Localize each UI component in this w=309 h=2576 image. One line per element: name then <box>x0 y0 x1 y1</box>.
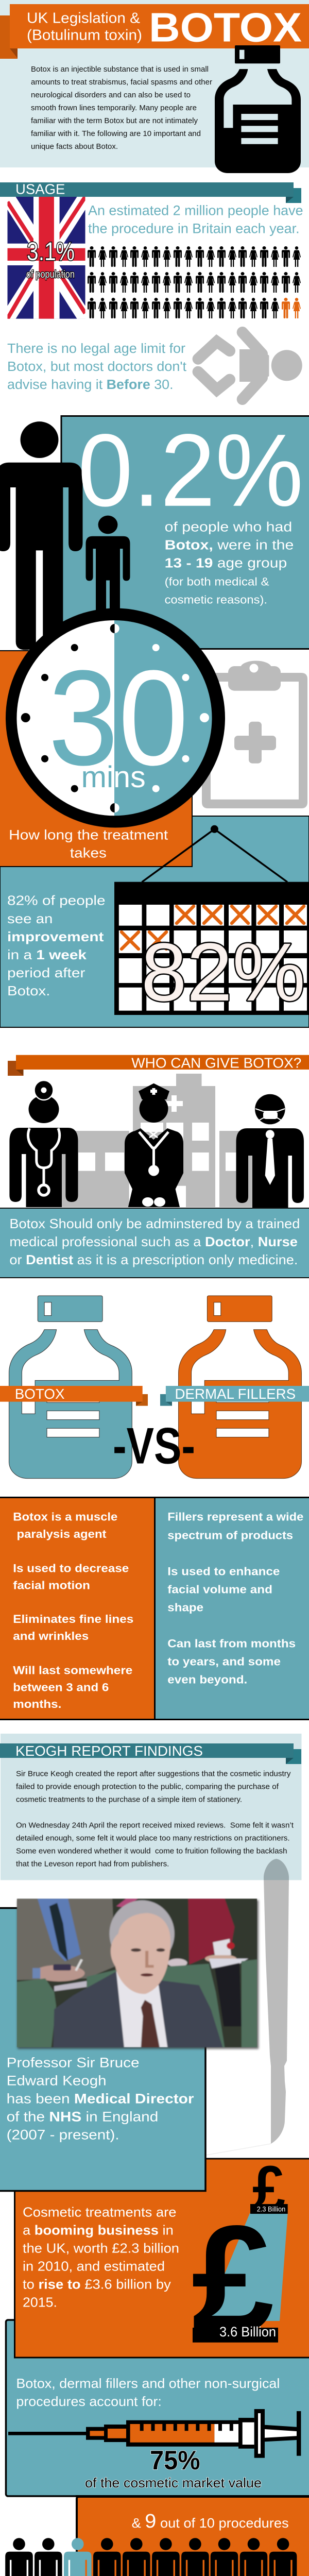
75 percent label: 75% <box>150 2446 200 2476</box>
teen stat text: of people who had <box>165 520 292 535</box>
improvement stat text: in a 1 week <box>7 947 87 962</box>
title banner: (Botulinum toxin) <box>27 27 142 44</box>
icon: clock showing 30 mins: 30 <box>48 642 188 793</box>
icon: hanging calendar <box>114 825 309 1018</box>
intro text: neurological disorders and can also be used to <box>31 91 191 99</box>
icon: union jack flag with 3.1% <box>7 197 85 319</box>
age limit text: advise having it Before 30. <box>7 378 174 392</box>
usage banner: USAGE <box>15 181 65 197</box>
panel: botox facts: Botox is a muscle <box>13 1511 117 1523</box>
panel: 0.2 percent <box>0 416 309 650</box>
intro text: Botox is an injectible substance that is used in small <box>31 65 209 74</box>
intro text: smooth frown lines temporarily. Many people are <box>31 104 197 112</box>
intro text: unique facts about Botox. <box>31 142 118 151</box>
icon: union jack flag with 3.1%: 3.1% <box>27 237 75 266</box>
treatment time caption: How long the treatment <box>9 827 168 842</box>
panel: keogh report: failed to provide enough protection to the public, comparing the purchase of <box>16 1783 279 1791</box>
icon: clipboard <box>202 660 307 808</box>
icon: nurse <box>125 1083 183 1207</box>
usage statement: An estimated 2 million people have <box>88 202 303 218</box>
improvement stat text: 82% of people <box>7 893 106 908</box>
title banner: BOTOX <box>149 5 302 50</box>
panel: filler facts: Is used to enhance <box>167 1565 280 1578</box>
botox ribbon: BOTOX <box>15 1386 65 1402</box>
panel: botox facts: months. <box>13 1698 61 1710</box>
icon: orange filler bottle <box>179 1296 301 1479</box>
age limit text <box>7 342 186 392</box>
panel: filler facts: spectrum of products <box>167 1529 293 1541</box>
panel: 82 percent background <box>0 816 309 1027</box>
panel: keogh report <box>0 1734 302 1880</box>
intro text <box>31 65 212 151</box>
teen stat text: 13 - 19 age group <box>165 556 287 571</box>
panel: keogh report: KEOGH REPORT FINDINGS <box>15 1743 203 1759</box>
panel: botox facts: paralysis agent <box>16 1528 107 1540</box>
market value text: procedures account for: <box>16 2394 162 2409</box>
panel: botox facts: facial motion <box>13 1579 90 1591</box>
chart: pound growth: £ <box>192 2194 274 2364</box>
chart: pound growth: 2.3 Billion <box>257 2205 285 2213</box>
market value text <box>16 2376 280 2409</box>
market growth text: to rise to £3.6 billion by <box>23 2277 171 2292</box>
improvement stat text <box>7 893 106 998</box>
professor keogh text: of the NHS in England <box>7 2109 158 2125</box>
icon: clock showing 30 mins: mins <box>81 760 146 794</box>
people row: 9 of 10 <box>5 2538 297 2576</box>
75 percent label: of the cosmetic market value <box>85 2475 262 2490</box>
panel: filler facts <box>154 1497 309 1720</box>
panel: nine of ten procedures: & 9 out of 10 procedures <box>132 2511 289 2532</box>
chart: pound growth: 3.6 Billion <box>219 2324 276 2340</box>
intro text: familiar with it. The following are 10 important and <box>31 129 201 138</box>
panel: keogh report: Some even wondered whether it would come to fruition following the backlash <box>16 1848 287 1856</box>
icon: grey baby <box>198 332 302 399</box>
improvement stat text: Botox. <box>7 983 50 998</box>
panel: botox facts: Eliminates fine lines <box>13 1613 133 1625</box>
panel: filler facts: Can last from months <box>167 1637 296 1650</box>
professor keogh text: Professor Sir Bruce <box>7 2055 140 2071</box>
panel: nine of ten procedures <box>77 2497 309 2576</box>
professor keogh text: has been Medical Director <box>7 2091 194 2107</box>
age limit text: There is no legal age limit for <box>7 342 186 356</box>
icon: union jack flag with 3.1%: of population <box>26 269 75 280</box>
panel: keogh report: Sir Bruce Keogh created the report after suggestions that the cosmetic industry <box>16 1770 291 1778</box>
panel: who can give botox text <box>0 1208 309 1278</box>
icon: grey scalpel <box>206 1859 289 2155</box>
professor keogh text <box>7 2055 194 2143</box>
panel: botox facts: and wrinkles <box>13 1630 89 1642</box>
panel: filler facts: even beyond. <box>167 1673 247 1686</box>
panel: botox facts: between 3 and 6 <box>13 1681 109 1693</box>
usage banner <box>0 181 301 203</box>
market growth text <box>23 2205 179 2310</box>
improvement stat text: see an <box>7 911 53 926</box>
improvement stat text: improvement <box>7 929 104 944</box>
market growth text: a booming business in <box>23 2223 174 2238</box>
market value text: Botox, dermal fillers and other non-surgical <box>16 2376 280 2391</box>
teen stat text: Botox, were in the <box>165 538 294 553</box>
icon: hospital building <box>62 1074 252 1207</box>
market value panel lower edge <box>76 2495 309 2497</box>
usage statement: the procedure in Britain each year. <box>88 221 300 236</box>
market growth text: in 2010, and estimated <box>23 2259 165 2274</box>
market growth text: Cosmetic treatments are <box>23 2205 176 2220</box>
market growth text: the UK, worth £2.3 billion <box>23 2241 179 2256</box>
icon: large man <box>0 421 82 650</box>
icon: dentist <box>236 1094 304 1209</box>
teen stat text: (for both medical & <box>165 575 269 588</box>
panel: keogh report: cosmetic treatments to the purchase of a simple item of stationery. <box>16 1796 242 1804</box>
usage statement <box>88 202 303 236</box>
intro text: familiar with the term Botox but are not intimately <box>31 116 198 125</box>
icon: hanging calendar: 82% <box>141 926 305 1018</box>
photo: Sir Bruce Keogh <box>17 1899 259 2049</box>
intro text: amounts to treat strabismus, facial spasms and other <box>31 78 212 87</box>
market growth text: 2015. <box>23 2295 57 2310</box>
versus label: -VS- <box>113 1417 195 1475</box>
panel: botox facts: Is used to decrease <box>13 1562 129 1575</box>
treatment time caption: takes <box>70 845 107 860</box>
botox ribbon <box>0 1386 148 1406</box>
panel: intro background <box>0 0 309 167</box>
dermal fillers ribbon: DERMAL FILLERS <box>175 1386 296 1402</box>
panel: professor keogh <box>0 1908 205 2191</box>
panel: treatment time <box>0 651 192 867</box>
panel: keogh report: detailed enough, some felt it would place too many restrictions on practitioners. <box>16 1835 290 1843</box>
teen stat text: cosmetic reasons). <box>165 594 267 606</box>
teen stat text <box>165 520 294 606</box>
panel: botox facts: Will last somewhere <box>13 1664 132 1676</box>
panel: filler facts: Fillers represent a wide <box>167 1511 303 1523</box>
panel: botox facts <box>0 1497 154 1720</box>
panel: filler facts: facial volume and <box>167 1583 272 1596</box>
panel: who can give botox text: medical professional such as a Doctor, Nurse <box>9 1234 298 1249</box>
panel: who can give botox text: or Dentist as it is a prescription only medicine. <box>9 1252 298 1267</box>
professor keogh text: Edward Keogh <box>7 2073 107 2089</box>
icon: small man <box>85 516 130 631</box>
icon: black botox bottle <box>215 45 301 173</box>
people grid: 3.1 percent <box>88 246 301 318</box>
panel: filler facts: shape <box>167 1601 203 1614</box>
panel: uk market growth <box>14 2159 309 2358</box>
big percentage 0.2%: 0.2% <box>78 413 303 528</box>
dermal fillers ribbon <box>160 1386 309 1406</box>
panel: market value <box>6 2320 309 2496</box>
panel: filler facts: to years, and some <box>167 1655 281 1668</box>
chart: pound growth: £ <box>252 2153 285 2226</box>
icon: clock showing 30 mins <box>6 608 225 827</box>
title banner: UK Legislation & <box>27 10 140 26</box>
title banner <box>0 4 309 59</box>
panel: keogh report: that the Leveson report had from publishers. <box>16 1860 169 1869</box>
icon: doctor <box>9 1080 78 1207</box>
age limit text: Botox, but most doctors don't <box>7 360 186 374</box>
who can give botox banner: WHO CAN GIVE BOTOX? <box>131 1055 301 1071</box>
icon: syringe showing 75 percent <box>8 2409 301 2458</box>
professor keogh text: (2007 - present). <box>7 2127 119 2143</box>
panel: keogh report: On Wednesday 24th April the report received mixed reviews. Some felt it wasn’t <box>16 1822 294 1830</box>
panel: who can give botox text: Botox Should only be adminstered by a trained <box>9 1216 300 1231</box>
icon: teal botox bottle <box>9 1296 132 1479</box>
who can give botox banner <box>8 1055 309 1076</box>
improvement stat text: period after <box>7 965 85 980</box>
75 percent label <box>85 2446 262 2490</box>
treatment time caption <box>9 827 168 860</box>
